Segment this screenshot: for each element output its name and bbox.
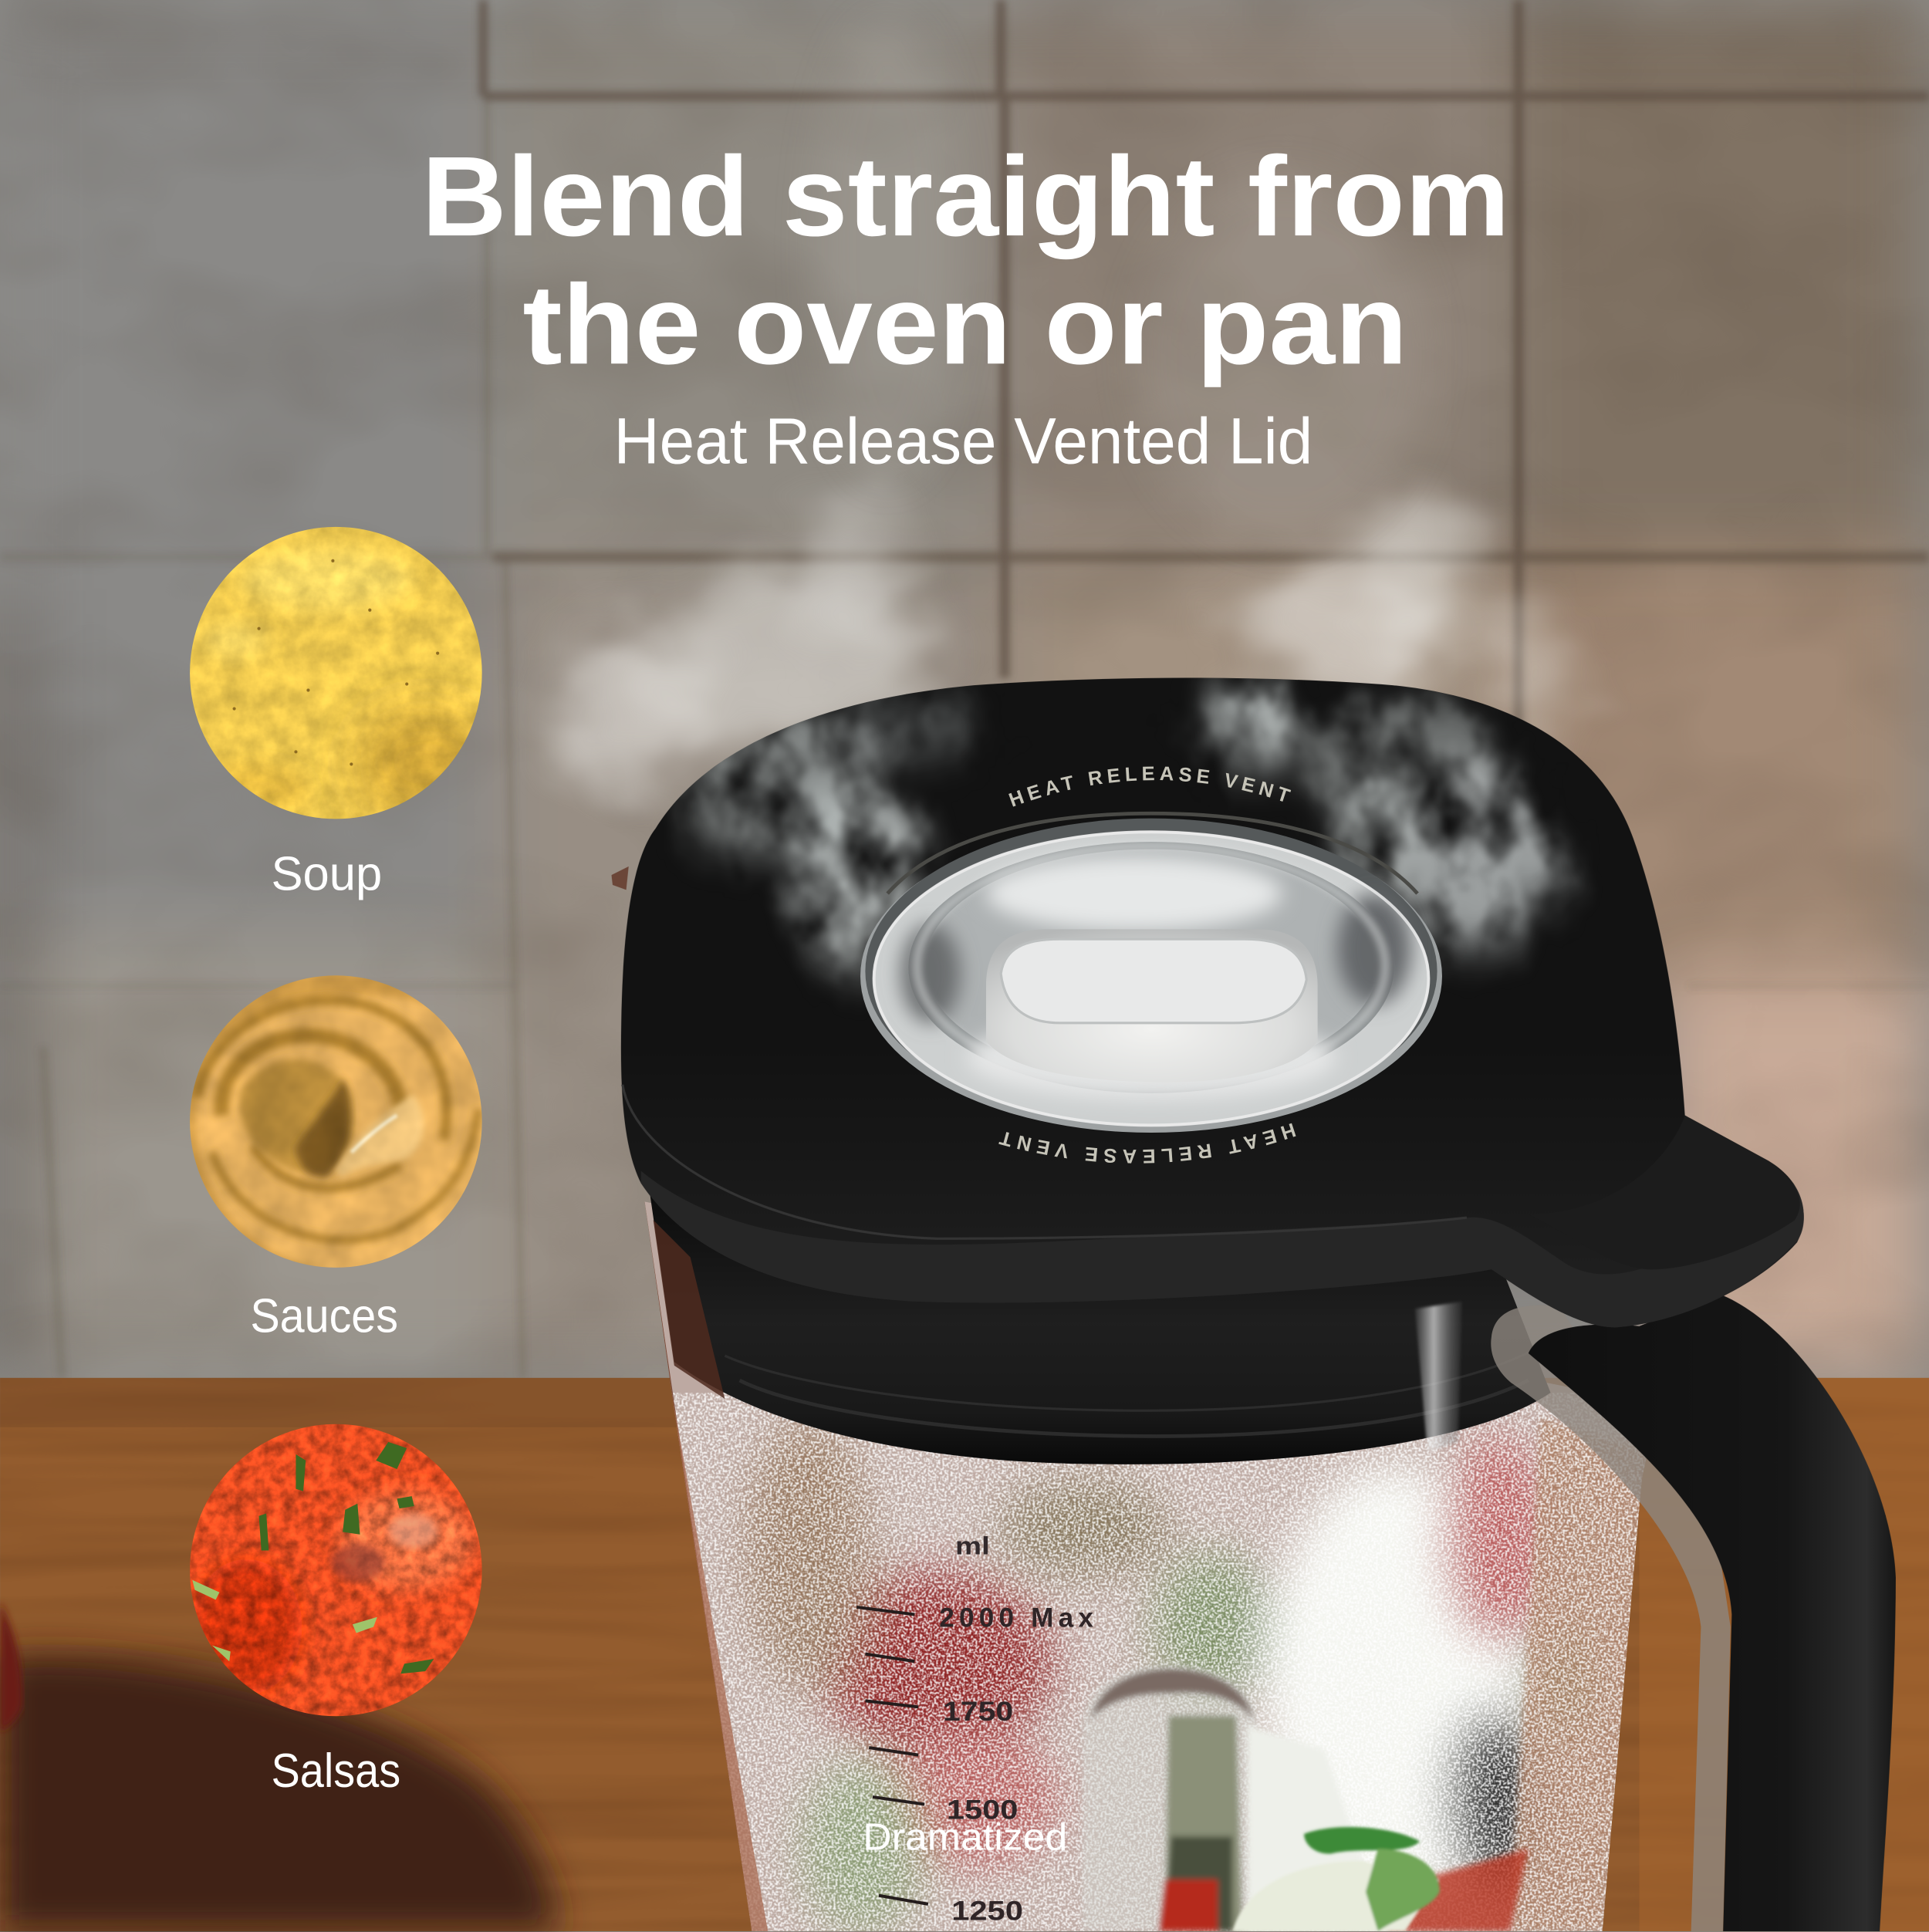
clear heat release vent cap	[860, 819, 1442, 1133]
vent tab	[986, 929, 1318, 1083]
jar volume markings: 1750	[943, 1697, 1013, 1727]
title: Blend straight from	[421, 133, 1510, 260]
dramatized note: Dramatized	[863, 1816, 1067, 1859]
blender jar	[617, 1183, 1676, 1932]
title	[421, 133, 1510, 388]
food circle: soup	[185, 524, 493, 826]
black collar under lid	[648, 1183, 1551, 1464]
counter: wooden worktop and shadow	[0, 1378, 1929, 1931]
jar glass and frosted contents	[617, 1183, 1676, 1932]
jar volume markings: 2000 Max	[939, 1603, 1093, 1633]
jar volume markings	[856, 1532, 1093, 1927]
light reflection strip	[1415, 1302, 1462, 1452]
salsas label: Salsas	[271, 1745, 400, 1798]
food circle: sauces	[185, 974, 487, 1275]
steam above the lid	[552, 12, 1572, 785]
lid	[611, 677, 1804, 1358]
title: the oven or pan	[522, 262, 1407, 388]
left glass wall	[623, 1183, 752, 1931]
food circle: salsas	[185, 1417, 487, 1719]
basil leaf	[1232, 1827, 1440, 1931]
condensation droplets	[672, 1393, 1646, 1931]
sauces label: Sauces	[250, 1290, 398, 1343]
central tube and blade stem	[1083, 1663, 1529, 1931]
spout knob on left of lid	[611, 866, 629, 890]
right clear side of jar	[1510, 1417, 1658, 1931]
lid text: heat release vent (bottom): HEAT RELEASE VENT	[998, 1123, 1296, 1164]
jar volume markings: 1250	[951, 1897, 1023, 1927]
jar volume markings: 1500	[947, 1795, 1018, 1826]
soup label: Soup	[271, 847, 382, 900]
recessed ring behind vent	[887, 813, 1417, 893]
jar volume markings: ml	[955, 1532, 990, 1559]
handle	[1491, 1294, 1896, 1931]
subtitle: Heat Release Vented Lid	[614, 404, 1312, 478]
lid text: heat release vent (top): HEAT RELEASE VENT	[1008, 767, 1292, 807]
steam swirling on lid	[672, 678, 1559, 980]
background: tiled kitchen wall	[0, 0, 1929, 1380]
